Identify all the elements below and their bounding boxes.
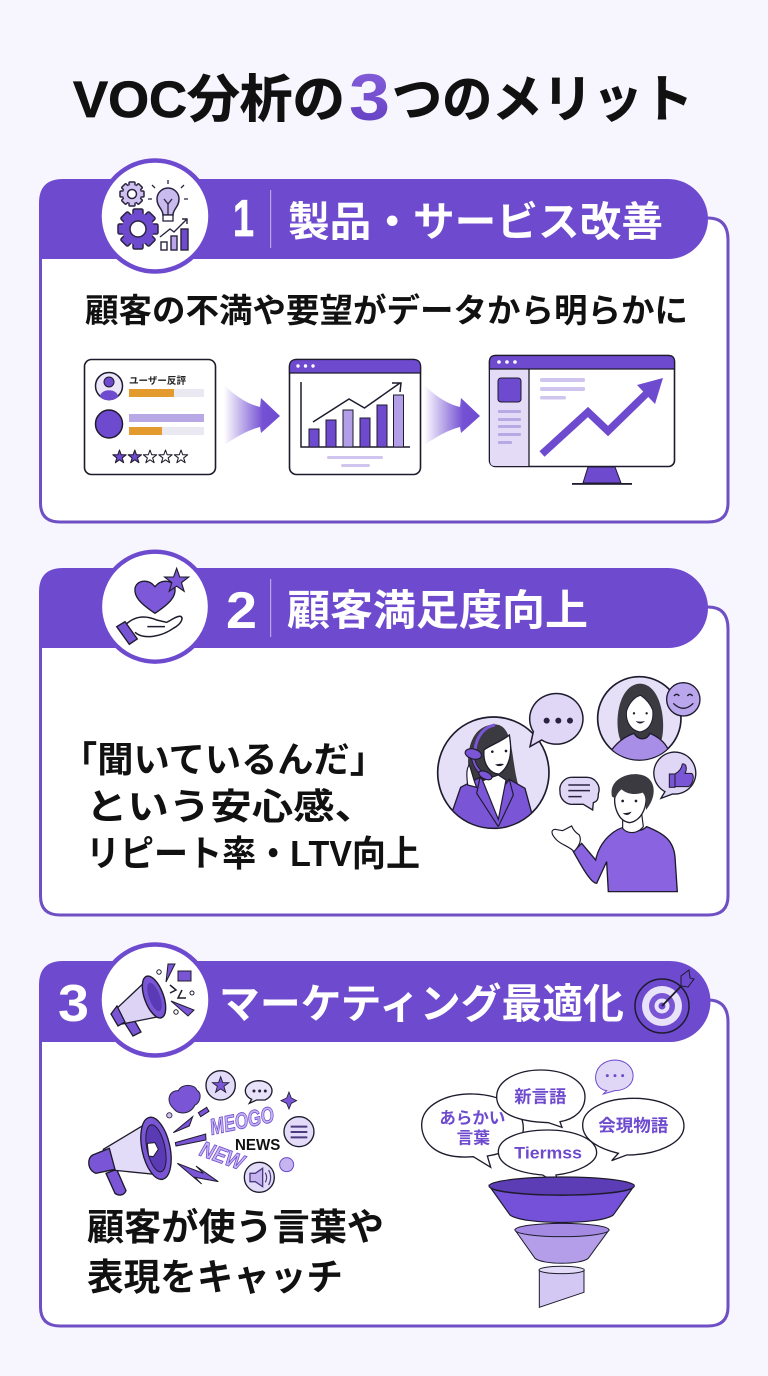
- customer woman: [598, 677, 681, 763]
- number 3: 3: [58, 975, 89, 1033]
- funnel top: [489, 1177, 634, 1222]
- icon: gears, lightbulb and growth chart: [100, 160, 210, 272]
- cloud icon: [167, 1085, 200, 1118]
- heading 1: 製品・サービス改善: [288, 199, 663, 245]
- bubble: 会現物語: 会現物語: [598, 1116, 668, 1136]
- header bar 2: [39, 568, 708, 648]
- word: NEW: NEW: [197, 1136, 249, 1176]
- body text 2: リピート率・LTV向上: [86, 833, 420, 874]
- body text 2: [61, 739, 420, 874]
- subtitle 1: 顧客の不満や要望がデータから明らかに: [85, 292, 688, 329]
- bubble: 会現物語: [583, 1098, 684, 1161]
- title: 3: [349, 60, 390, 134]
- heading 3: マーケティング最適化: [219, 981, 624, 1027]
- megaphone: [89, 1114, 176, 1195]
- smile icon: [667, 683, 700, 716]
- title: VOC分析の: [73, 71, 345, 128]
- body text 2: 「聞いているんだ」: [61, 739, 386, 780]
- heading 2: 顧客満足度向上: [287, 587, 588, 634]
- panel: 製品・サービス改善: [39, 160, 728, 522]
- body text 3: [87, 1207, 384, 1298]
- speaker icon: [244, 1162, 274, 1192]
- review window: ユーザー反評: [129, 376, 186, 387]
- text bubble: [560, 777, 599, 810]
- illustration: speech bubbles into funnel: [422, 1060, 684, 1307]
- small bubble: [596, 1060, 633, 1094]
- thumbs-up bubble: [654, 752, 696, 798]
- funnel bottom: [539, 1266, 584, 1307]
- chat icon: [245, 1081, 272, 1103]
- word: MEOGO: MEOGO: [207, 1101, 277, 1140]
- body text 3: 表現をキャッチ: [87, 1257, 343, 1298]
- bubble: 新言語: [497, 1070, 585, 1127]
- speech bubble dots: [530, 694, 583, 747]
- man: [552, 774, 677, 892]
- review window: [84, 360, 216, 474]
- illustration: megaphone with word cloud: [89, 1071, 314, 1195]
- arrow 2: [424, 385, 480, 445]
- title: つのメリット: [392, 71, 693, 128]
- number 1: 1: [233, 190, 254, 248]
- panel: マーケティング最適化: [39, 944, 728, 1326]
- panel: 顧客満足度向上: [39, 552, 728, 915]
- body text 2: という安心感、: [86, 786, 376, 827]
- title: [73, 60, 693, 134]
- burst marks: [173, 1107, 218, 1184]
- dot: [280, 1158, 294, 1172]
- number 2: 2: [226, 582, 257, 640]
- monitor with growth arrow: [490, 356, 674, 485]
- menu icon: [284, 1117, 314, 1147]
- icon: target with dart: [635, 970, 694, 1033]
- bubble: 新言語: 新言語: [514, 1086, 566, 1106]
- card body 1: [40, 218, 728, 522]
- arrow 1: [224, 385, 280, 445]
- chart window: [290, 360, 420, 474]
- sparkle: [281, 1092, 297, 1109]
- star icon: [206, 1071, 235, 1100]
- bubble: あらかい言葉: [422, 1094, 523, 1167]
- illustration: customer conversation: [438, 677, 700, 892]
- word: NEWS: NEWS: [235, 1137, 280, 1154]
- bubble: Tiermss: [498, 1130, 597, 1185]
- header bar 3: [39, 961, 710, 1042]
- bubble: Tiermss: Tiermss: [514, 1143, 582, 1162]
- icon: megaphone badge: [100, 944, 210, 1056]
- header bar 1: [39, 179, 708, 259]
- card body 2: [40, 607, 728, 915]
- operator woman: [438, 717, 549, 833]
- card body 3: [40, 1000, 728, 1326]
- body text 3: 顧客が使う言葉や: [87, 1207, 384, 1248]
- icon: heart, star and hand: [100, 552, 210, 662]
- bubble: あらかい言葉: あらかい: [439, 1108, 505, 1127]
- funnel middle: [515, 1223, 609, 1263]
- bubble: あらかい言葉: 言葉: [457, 1128, 490, 1147]
